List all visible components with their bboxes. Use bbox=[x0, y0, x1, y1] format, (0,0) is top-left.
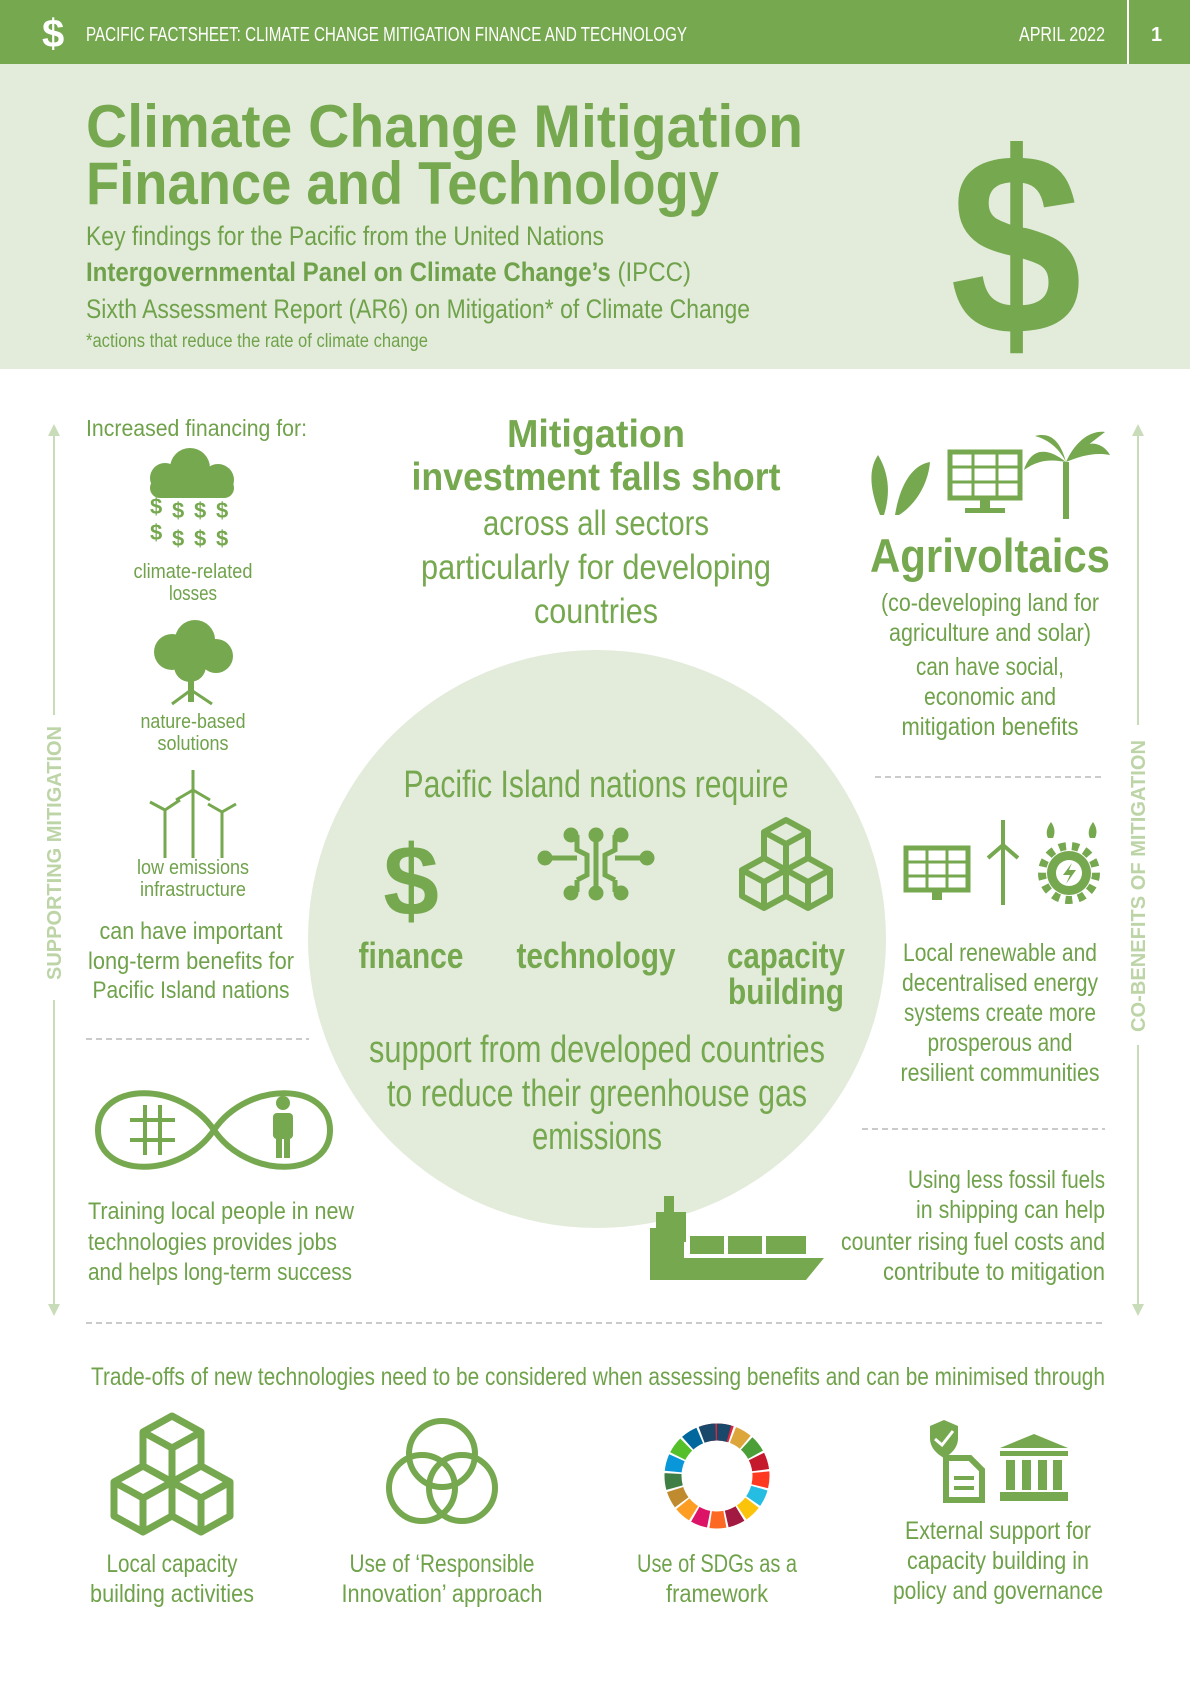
panel: central circle: to reduce their greenhouse gas bbox=[387, 1073, 807, 1115]
panel: increased financing: losses bbox=[169, 583, 217, 605]
icon: cloud with dollars: $ bbox=[150, 520, 162, 545]
subtitle bbox=[86, 221, 750, 352]
icon: cloud with dollars: $ bbox=[172, 526, 184, 551]
panel: agrivoltaics: Agrivoltaics bbox=[870, 529, 1110, 582]
heading: investment falls short bbox=[412, 413, 781, 631]
panel: increased financing: can have important bbox=[100, 918, 283, 945]
icon: wind turbines bbox=[150, 770, 236, 858]
panel: SDGs: framework bbox=[666, 1580, 768, 1608]
header bar bbox=[0, 0, 1190, 64]
icon: solar, turbine, gear bbox=[906, 820, 1096, 905]
panel: central circle: finance bbox=[358, 935, 464, 976]
panel: central circle: technology bbox=[516, 935, 676, 976]
arrow: supporting mitigation: SUPPORTING MITIGATION bbox=[44, 726, 66, 980]
panel: responsible innovation bbox=[342, 1421, 542, 1608]
icon: cloud with dollars: $ bbox=[194, 498, 206, 523]
header bar: $ bbox=[42, 12, 64, 56]
icon: cloud with dollars bbox=[150, 448, 234, 551]
panel: central circle: support from developed countries bbox=[369, 1029, 825, 1071]
panel: local capacity building: Local capacity bbox=[106, 1550, 238, 1578]
panel: shipping: contribute to mitigation bbox=[883, 1258, 1105, 1286]
panel: agrivoltaics: (co-developing land for bbox=[881, 589, 1099, 617]
panel: central circle: capacity bbox=[727, 935, 845, 976]
panel: increased financing: nature-based bbox=[140, 711, 246, 733]
panel: training: technologies provides jobs bbox=[88, 1229, 337, 1256]
title band bbox=[0, 64, 1190, 390]
subtitle: Sixth Assessment Report (AR6) on Mitigation* of Climate Change bbox=[86, 294, 750, 324]
panel: external support: External support for bbox=[905, 1517, 1091, 1545]
panel: central circle: Pacific Island nations require bbox=[404, 764, 788, 806]
panel: agrivoltaics: mitigation benefits bbox=[902, 713, 1078, 741]
panel: SDGs bbox=[637, 1432, 797, 1608]
panel: agrivoltaics: economic and bbox=[924, 683, 1056, 711]
icon: dollar: $ bbox=[383, 825, 439, 937]
header bar: 1 bbox=[1151, 24, 1162, 46]
panel: local capacity building bbox=[90, 1416, 254, 1608]
icon: cubes bbox=[742, 820, 830, 908]
icon: ship bbox=[650, 1196, 824, 1280]
icon: tree bbox=[154, 620, 233, 704]
panel: shipping bbox=[650, 1166, 1105, 1286]
panel: local renewable energy: decentralised energy bbox=[902, 969, 1098, 997]
panel: central circle bbox=[308, 650, 886, 1228]
icon: cubes bbox=[114, 1416, 230, 1532]
arrow: co-benefits of mitigation bbox=[1128, 424, 1150, 1316]
panel: external support: capacity building in bbox=[907, 1547, 1089, 1575]
panel: agrivoltaics bbox=[870, 432, 1110, 741]
title bbox=[86, 93, 803, 217]
panel: local capacity building: building activities bbox=[90, 1580, 254, 1608]
panel: central circle: emissions bbox=[532, 1116, 662, 1158]
heading: investment falls short: across all sectors bbox=[483, 504, 709, 543]
panel: increased financing: climate-related bbox=[134, 561, 252, 583]
heading: investment falls short: countries bbox=[534, 592, 658, 631]
subtitle: Intergovernmental Panel on Climate Change’s (IPCC) bbox=[86, 257, 691, 287]
panel: training bbox=[88, 1093, 355, 1286]
panel: external support: policy and governance bbox=[893, 1577, 1103, 1605]
panel: increased financing: Pacific Island nations bbox=[92, 977, 290, 1004]
icon: cloud with dollars: $ bbox=[194, 526, 206, 551]
subtitle: *actions that reduce the rate of climate change bbox=[86, 331, 428, 352]
panel: local renewable energy bbox=[900, 820, 1100, 1087]
arrow: co-benefits of mitigation: CO-BENEFITS OF MITIGATION bbox=[1128, 740, 1150, 1032]
panel: local renewable energy: resilient communities bbox=[900, 1059, 1100, 1087]
panel: agrivoltaics: agriculture and solar) bbox=[889, 619, 1091, 647]
heading: investment falls short: investment falls short bbox=[412, 456, 781, 499]
panel: local renewable energy: prosperous and bbox=[928, 1029, 1072, 1057]
icon: cloud with dollars: $ bbox=[172, 498, 184, 523]
panel: increased financing: Increased financing for: bbox=[86, 415, 307, 441]
panel: shipping: in shipping can help bbox=[916, 1196, 1105, 1224]
panel: training: and helps long-term success bbox=[88, 1259, 352, 1286]
icon: infinity bbox=[98, 1093, 330, 1167]
header bar: PACIFIC FACTSHEET: CLIMATE CHANGE MITIGATION FINANCE AND TECHNOLOGY bbox=[86, 24, 687, 46]
arrow: supporting mitigation bbox=[44, 424, 66, 1316]
icon: cloud with dollars: $ bbox=[216, 498, 228, 523]
panel: local renewable energy: Local renewable and bbox=[903, 939, 1097, 967]
panel: central circle: building bbox=[728, 971, 844, 1012]
icon: three circles bbox=[389, 1421, 495, 1521]
panel: responsible innovation: Use of ‘Responsible bbox=[350, 1550, 534, 1578]
icon: technology bbox=[540, 830, 652, 898]
icon: cloud with dollars: $ bbox=[150, 494, 162, 519]
panel: shipping: counter rising fuel costs and bbox=[841, 1228, 1105, 1256]
panel: increased financing: solutions bbox=[158, 733, 228, 755]
subtitle: Key findings for the Pacific from the United Nations bbox=[86, 221, 604, 251]
panel: training: Training local people in new bbox=[88, 1198, 355, 1225]
panel: increased financing: long-term benefits for bbox=[88, 948, 294, 975]
panel: agrivoltaics: can have social, bbox=[916, 653, 1064, 681]
heading: investment falls short: Mitigation bbox=[507, 413, 685, 456]
title: Finance and Technology bbox=[86, 150, 720, 217]
icon: document and institution bbox=[930, 1420, 1068, 1501]
icon: SDG wheel bbox=[673, 1432, 761, 1520]
panel: local renewable energy: systems create more bbox=[904, 999, 1096, 1027]
panel: increased financing bbox=[86, 415, 307, 1004]
title: Climate Change Mitigation bbox=[86, 93, 803, 160]
panel: increased financing: low emissions bbox=[137, 857, 249, 879]
panel: increased financing: infrastructure bbox=[140, 879, 246, 901]
panel: SDGs: Use of SDGs as a bbox=[637, 1550, 797, 1578]
panel: external support bbox=[893, 1420, 1103, 1605]
panel: responsible innovation: Innovation’ approach bbox=[342, 1580, 542, 1608]
icon: cloud with dollars: $ bbox=[216, 526, 228, 551]
header bar: APRIL 2022 bbox=[1019, 24, 1105, 46]
icon: big dollar: $ bbox=[950, 100, 1082, 390]
panel: shipping: Using less fossil fuels bbox=[908, 1166, 1105, 1194]
heading: investment falls short: particularly for developing bbox=[421, 548, 771, 587]
icon: plants, solar, palm bbox=[871, 432, 1110, 519]
